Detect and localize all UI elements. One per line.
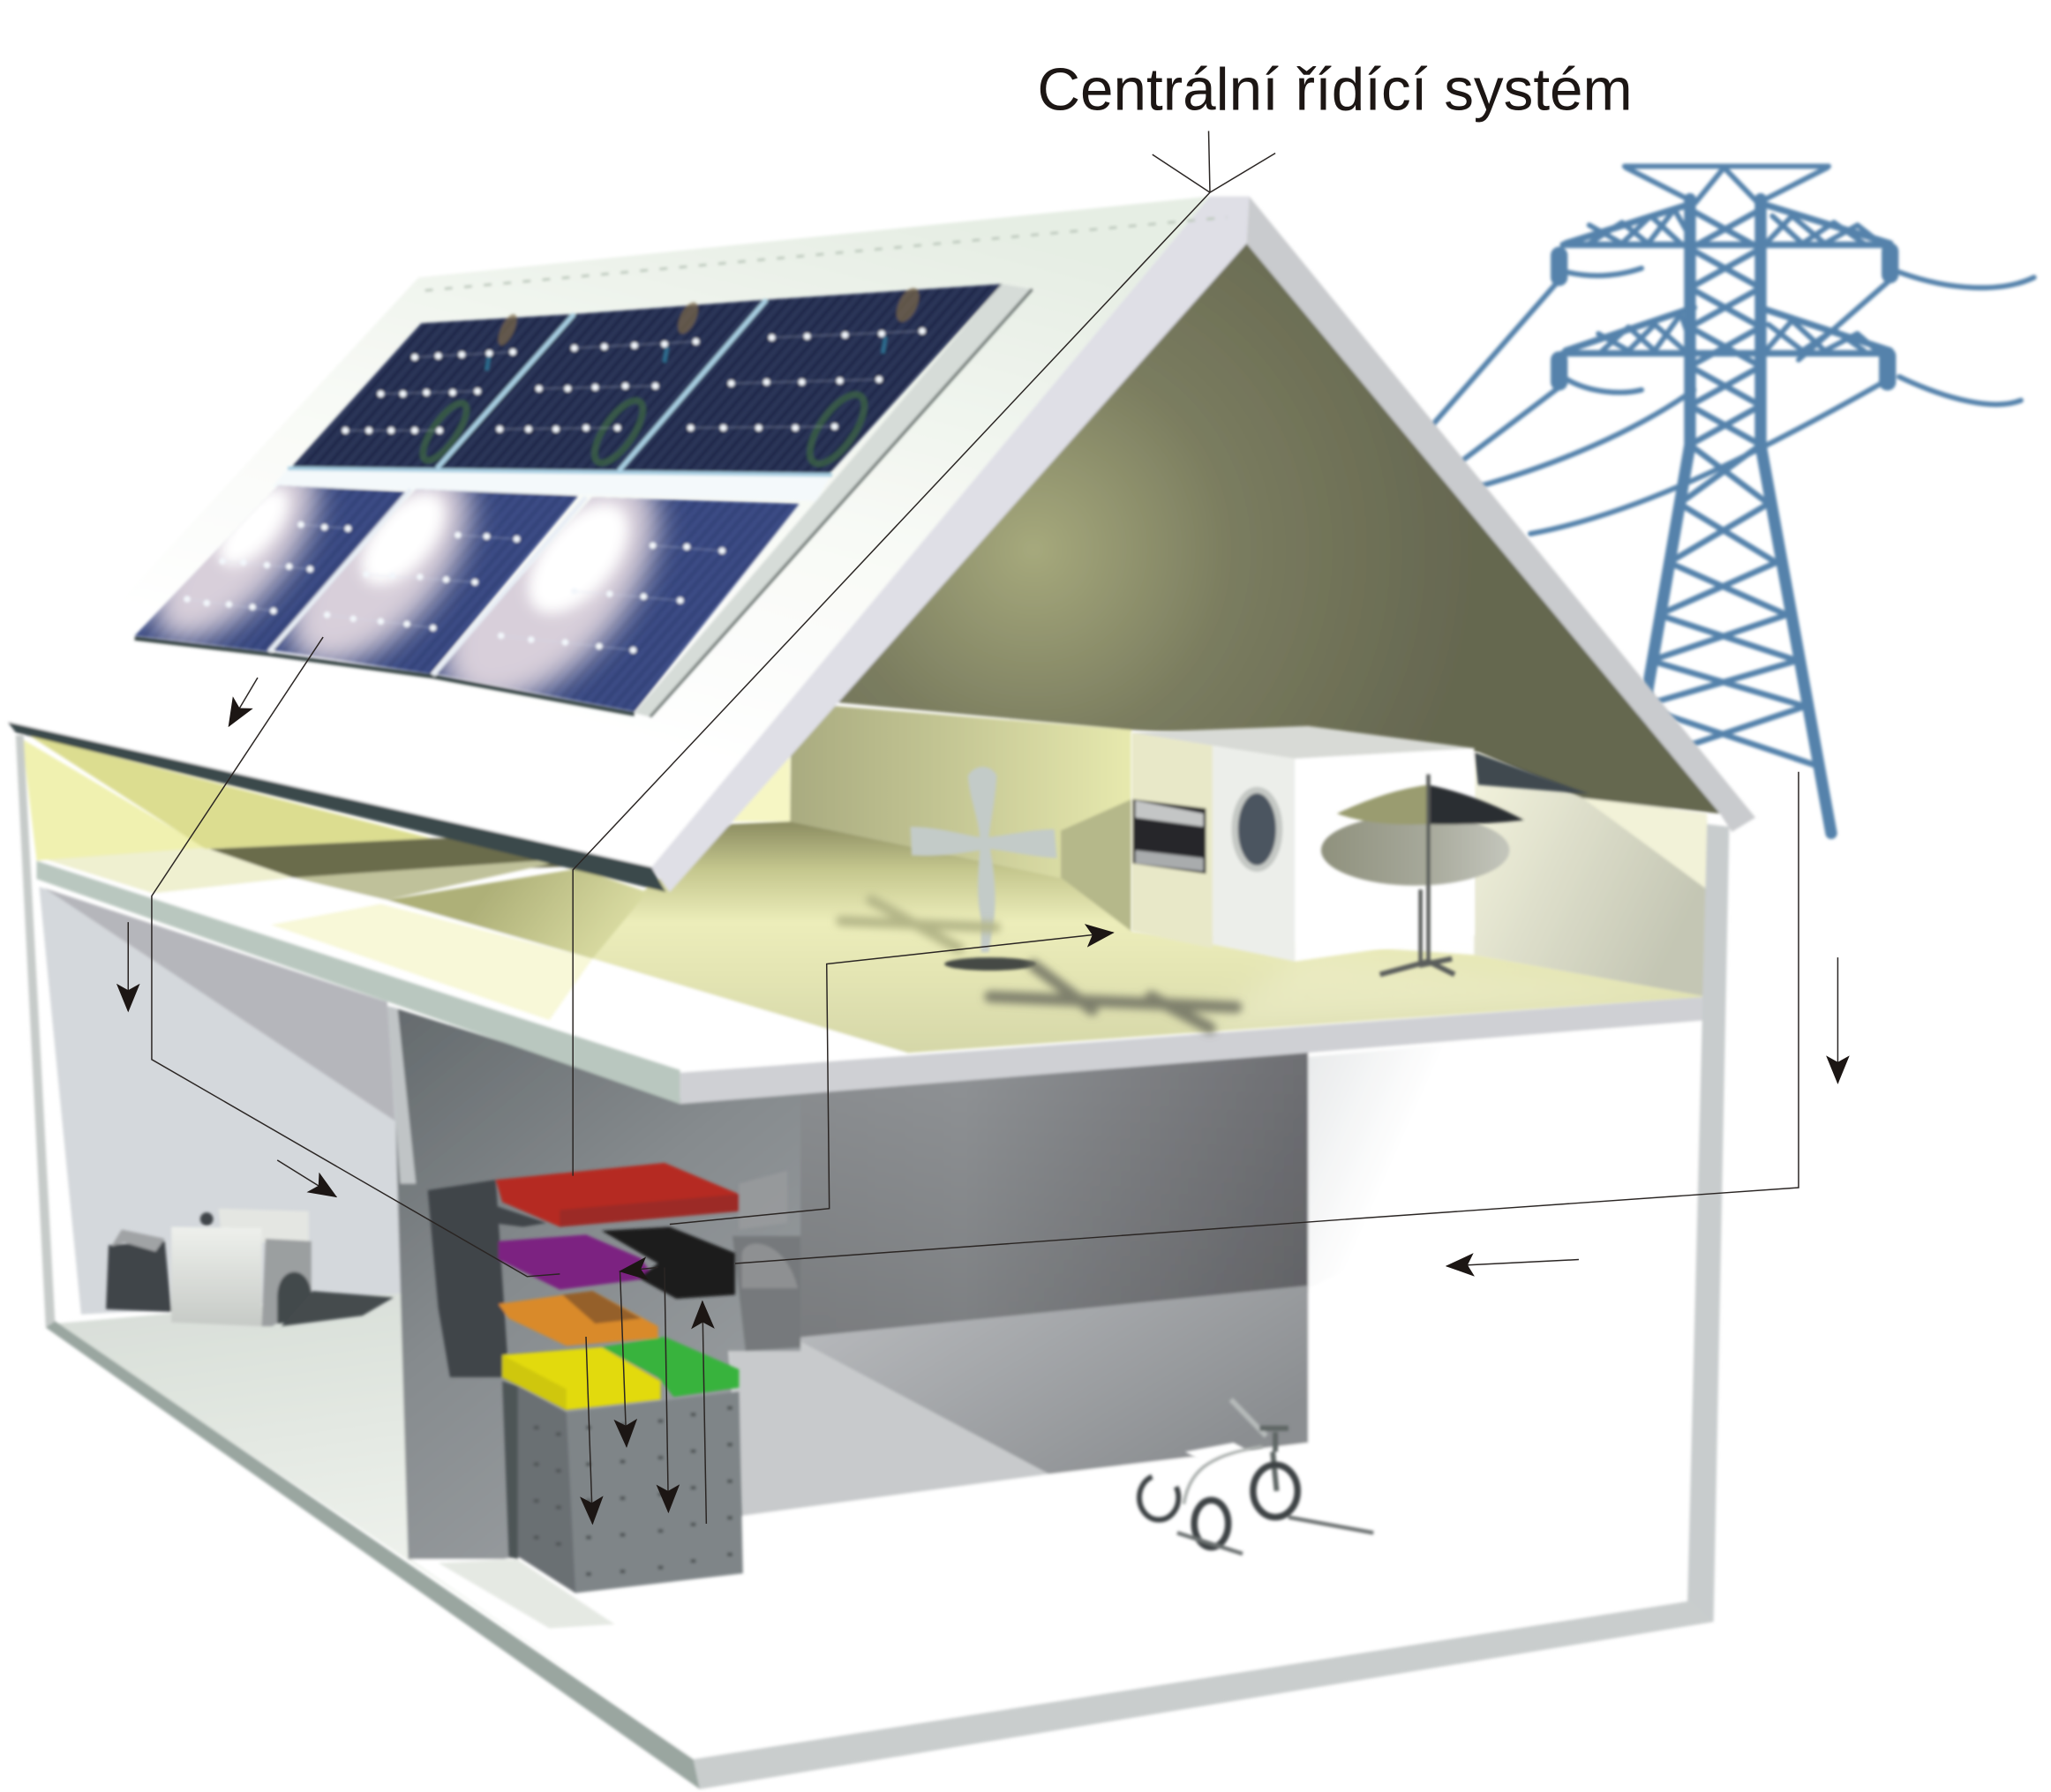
washing machine — [1131, 726, 1589, 962]
machine top — [1131, 726, 1474, 759]
appliance side — [261, 1239, 312, 1326]
line: grid input — [735, 772, 1799, 1263]
ridge marks — [425, 217, 1227, 290]
panel: partition lower shade — [732, 1236, 800, 1351]
arrow: stack up — [702, 1301, 706, 1524]
battery stack and modules — [428, 1163, 798, 1593]
panel cell dots — [187, 331, 922, 650]
title: Centrální řídící systém — [1037, 56, 1633, 124]
washer side — [1295, 748, 1474, 962]
panel reflections — [494, 284, 924, 348]
panel: attic cream band — [37, 848, 293, 894]
umbrella base — [1380, 959, 1454, 974]
appliance: lower left — [106, 1209, 394, 1326]
module: green — [602, 1337, 739, 1397]
panel: left wall shadow wedge — [44, 889, 395, 1121]
panel: attic cream patch — [271, 903, 592, 1020]
panel: lower back wall dark — [732, 1046, 1308, 1347]
panel: gable right band — [1246, 197, 1755, 832]
appliance cylinder — [171, 1226, 261, 1326]
black patch — [1133, 799, 1206, 874]
panel: central partition — [393, 1007, 800, 1559]
panel cell row lines — [187, 331, 922, 650]
panel: gable olive triangle — [838, 244, 1720, 814]
line: central controller — [573, 192, 1210, 1176]
arrow: solar flow — [229, 678, 258, 726]
panel: lower wall mid patch — [794, 1286, 1308, 1474]
bracket right translucent — [739, 1171, 787, 1229]
appliance dark block — [106, 1241, 171, 1312]
arrow: stack 1 — [586, 1337, 592, 1524]
arrow: grid down — [1837, 957, 1838, 1083]
panel: attic dark yellow — [29, 735, 432, 849]
panel frame rail — [635, 284, 1032, 716]
left block — [1131, 732, 1213, 948]
panel: roof surface — [8, 197, 1210, 867]
solar panels — [124, 284, 1032, 743]
panel: gable left band — [651, 197, 1249, 892]
panel: left outer wall — [16, 735, 55, 1328]
battery perforation — [537, 1406, 730, 1583]
panel: left room wall — [39, 887, 410, 1315]
panel green ovals — [416, 386, 875, 472]
panel: back wall cream patch — [732, 756, 790, 821]
antenna — [1153, 131, 1275, 192]
flow lines — [128, 131, 1837, 1524]
panel: left room floor — [55, 1293, 691, 1755]
panel: back wall right piece — [1061, 799, 1131, 932]
module: orange — [499, 1291, 658, 1346]
bottom row panel 3 — [436, 496, 801, 714]
panel: attic floor olive wedge — [387, 868, 648, 959]
panel: right outer wall — [1687, 824, 1729, 1622]
panel: roof eave — [8, 722, 665, 892]
washer front — [1213, 746, 1295, 962]
arrow: stack 3 — [665, 1267, 668, 1512]
dark bracket — [428, 1180, 509, 1377]
icon: electricity pylon — [1432, 166, 2034, 837]
arrow: grid left — [1446, 1260, 1579, 1266]
washer door — [1235, 790, 1280, 868]
umbrella canopy right — [1428, 785, 1524, 824]
panel: partition floor patch — [439, 1559, 615, 1629]
umbrella — [1321, 775, 1524, 974]
panel: attic back wall — [790, 702, 1131, 932]
icon: tricycle — [1139, 1399, 1373, 1554]
arrow: to appliances — [670, 933, 1113, 1225]
module: red — [492, 1204, 547, 1226]
appliance rear — [219, 1209, 309, 1242]
umbrella canopy left — [1337, 785, 1428, 824]
fan shadow — [841, 900, 1236, 1028]
house — [8, 197, 1755, 1789]
panel: right room ceiling shadow — [1308, 1023, 1701, 1288]
panel teal marks — [486, 336, 885, 371]
appliance shadow — [282, 1291, 394, 1326]
module: yellow — [502, 1347, 660, 1410]
module: purple — [499, 1234, 654, 1290]
panel: right room white background — [408, 1020, 1707, 1759]
icon: fan — [911, 767, 1057, 971]
panel: attic floor white front — [37, 848, 908, 1073]
panel: lower wall light patch — [729, 1286, 1308, 1516]
panel: attic light wedge — [293, 859, 575, 900]
panel: attic dark wedge — [209, 837, 582, 878]
panel: attic right wall — [1474, 752, 1707, 997]
umbrella pole — [1421, 775, 1428, 965]
panel: bottom left edge — [46, 1321, 700, 1789]
panel dividers — [437, 300, 767, 471]
line: solar to stack — [152, 637, 560, 1277]
top row panels — [290, 284, 1002, 474]
arrow: to stack — [277, 1160, 336, 1196]
panel: bottom right edge — [694, 1601, 1714, 1789]
arrow: stack 2 — [620, 1271, 627, 1446]
panel: attic floor right pale — [1177, 955, 1707, 1040]
arrow: down left — [127, 922, 129, 1011]
arrow: black to purple — [620, 1267, 658, 1271]
fan base — [944, 957, 1036, 971]
battery body — [518, 1386, 743, 1593]
battery left side — [502, 1381, 518, 1559]
panel: attic light yellow — [22, 739, 206, 860]
panel: slab edge left — [37, 860, 680, 1104]
panel: slab edge right — [680, 997, 1707, 1104]
bottom row panel 2 — [272, 489, 579, 676]
panel bottom edge — [135, 639, 635, 714]
module: black — [602, 1226, 735, 1299]
panel: partition light sliver — [387, 1006, 416, 1184]
umbrella shadow — [1321, 815, 1509, 886]
panel: attic floor — [592, 821, 1707, 1053]
bottom row panel 1 — [133, 484, 406, 654]
frame between rows — [272, 469, 832, 501]
